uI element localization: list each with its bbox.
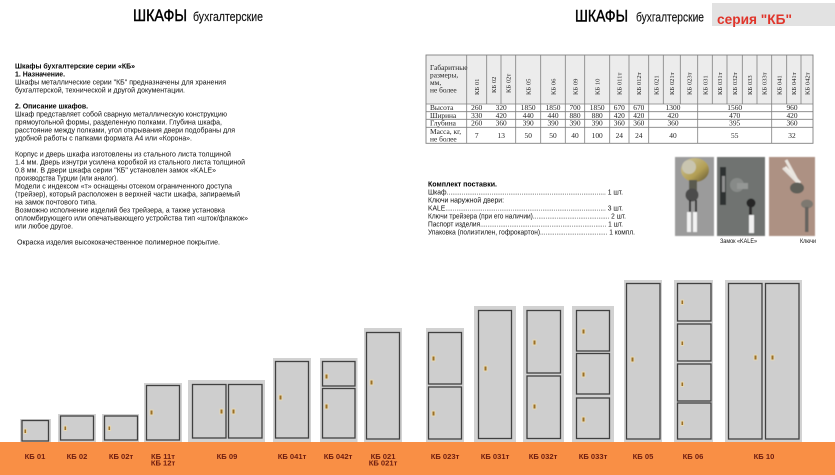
model column headings: КБ 02т xyxy=(506,74,513,93)
row: height: 1850 xyxy=(546,103,561,112)
description text block: Модели с индексом «т» оснащены отсеком ограниченного доступа xyxy=(15,182,233,190)
row: depth: 360 xyxy=(633,119,645,128)
description text block xyxy=(15,62,248,246)
model column headings: КБ 011т xyxy=(617,73,624,95)
description text block: удобной работы с папками формата А4 или «Корона». xyxy=(15,134,192,142)
row: depth: 390 xyxy=(523,119,534,128)
row: height: 670 xyxy=(633,103,645,112)
model column headings xyxy=(474,72,811,95)
cabinet model labels: КБ 031т xyxy=(481,452,510,461)
description text block: Корпус и дверь шкафа изготовлены из стального листа толщиной xyxy=(15,150,231,158)
cabinet: КБ 01 xyxy=(20,419,51,442)
row: height: 1850 xyxy=(521,103,536,112)
description text block: или любое другое. xyxy=(15,222,73,230)
row headings: Масса, кг, xyxy=(430,127,461,136)
description text block: на замок почтового типа. xyxy=(15,198,97,206)
row headings: Глубина xyxy=(430,119,457,128)
row: mass: 32 xyxy=(788,131,796,140)
series badge xyxy=(712,3,835,27)
delivery set text block: Комплект поставки. xyxy=(428,180,497,188)
row: mass: 50 xyxy=(549,131,557,140)
model column headings: КБ 10 xyxy=(594,78,602,95)
table grid xyxy=(426,55,813,143)
model column headings: КБ 02 xyxy=(491,77,498,93)
table header background xyxy=(426,55,813,104)
row: width: 440 xyxy=(547,111,559,120)
description text block: бухгалтерской, технической и другой документации. xyxy=(15,86,185,94)
cabinet: КБ 11т / КБ 12т xyxy=(144,383,182,442)
row: width: 420 xyxy=(614,111,625,120)
dimensions table xyxy=(426,55,813,144)
photo: keys xyxy=(769,157,815,236)
row: width: 330 xyxy=(471,111,483,120)
cabinet model labels: КБ 05 xyxy=(633,452,654,461)
row: mass: 100 xyxy=(592,131,603,140)
model column headings: КБ 06 xyxy=(550,78,557,95)
row: height: 670 xyxy=(614,103,625,112)
description text block: Возможно исполнение изделий без трейзера, а также установка xyxy=(15,206,226,214)
row: mass: 40 xyxy=(571,131,579,140)
model column headings: КБ 05 xyxy=(526,78,532,95)
cabinet model labels: КБ 09 xyxy=(217,452,237,461)
model column headings: КБ 041 xyxy=(776,75,784,95)
row: height: 1300 xyxy=(666,103,681,112)
model column headings: КБ 033 xyxy=(747,75,754,95)
cabinet: КБ 09 xyxy=(188,380,265,442)
photo captions xyxy=(720,238,816,245)
row: depth: 390 xyxy=(592,119,603,128)
orange floor band xyxy=(0,442,835,475)
description text block: 1.4 мм. Дверь изнутри усилена коробкой из стального листа толщиной xyxy=(15,158,245,167)
row: mass: 24 xyxy=(635,131,643,140)
cabinet: КБ 042т xyxy=(320,358,358,442)
cabinet model labels: КБ 11т xyxy=(151,452,175,461)
cabinet: КБ 021 / КБ 021т xyxy=(364,328,402,442)
model column headings: КБ 031 xyxy=(702,75,709,95)
right title: бухгалтерские xyxy=(636,10,704,24)
row: depth: 360 xyxy=(786,119,798,128)
row headings: не более xyxy=(430,86,457,94)
row: width: 420 xyxy=(633,111,645,120)
right title xyxy=(575,6,704,26)
delivery set text block: Ключи наружной двери: xyxy=(428,196,504,204)
row: mass: 40 xyxy=(669,131,677,140)
cabinet: КБ 06 xyxy=(674,280,713,442)
cabinet: КБ 023т xyxy=(426,328,464,442)
description text block: (трейзер), который расположен в верхней части шкафа, запираемый xyxy=(15,190,240,198)
cabinet: КБ 02 xyxy=(58,414,96,442)
model column headings: КБ 042т xyxy=(804,72,811,95)
delivery set text block: Паспорт изделия..................................................................... 1 шт. xyxy=(428,220,623,228)
right title: ШКАФЫ xyxy=(575,6,628,26)
description text block: 0.8 мм. В двери шкафа серии "КБ" установлен замок «KALE» xyxy=(15,166,216,175)
cabinet: КБ 05 xyxy=(624,280,662,442)
row: height: 700 xyxy=(569,103,581,112)
row: depth xyxy=(471,119,798,128)
row: depth: 390 xyxy=(547,119,559,128)
row headings: мм, xyxy=(430,78,441,87)
row: height: 1850 xyxy=(590,103,605,112)
left title xyxy=(133,6,263,25)
description text block: Шкафы бухгалтерские серии «КБ» xyxy=(15,62,135,70)
row: width xyxy=(471,111,798,120)
row: depth: 395 xyxy=(729,119,741,128)
cabinet model labels: КБ 021 xyxy=(371,452,396,461)
row: height: 260 xyxy=(471,103,483,112)
row headings: Высота xyxy=(430,103,454,112)
row headings xyxy=(430,63,468,144)
row headings: не более xyxy=(430,134,457,144)
row: width: 880 xyxy=(592,111,603,120)
row: mass: 24 xyxy=(616,131,623,140)
model column headings: КБ 01 xyxy=(474,79,481,95)
cabinet model labels: КБ 032т xyxy=(529,452,558,461)
cabinet model labels xyxy=(25,452,774,468)
model column headings: КБ 032т xyxy=(732,72,739,95)
photo captions: Ключи xyxy=(800,238,816,245)
row: width: 420 xyxy=(496,111,507,120)
description text block: опломбирующего или опечатывающего устройства тип «шток/флажок» xyxy=(15,214,248,222)
model column headings: КБ 031т xyxy=(717,72,724,95)
row: mass: 50 xyxy=(525,131,532,140)
row: mass: 7 xyxy=(475,131,479,140)
row: width: 880 xyxy=(569,111,581,120)
cabinet: КБ 10 xyxy=(725,280,802,442)
row: mass: 55 xyxy=(731,131,739,140)
left title: бухгалтерские xyxy=(193,10,263,24)
cabinet: КБ 041т xyxy=(273,358,311,442)
row headings: размеры, xyxy=(430,70,458,80)
row: mass xyxy=(475,131,796,140)
row: depth: 360 xyxy=(667,119,679,128)
description text block: 1. Назначение. xyxy=(15,70,65,78)
delivery set text block: KALE...................................................................................... 3 шт. xyxy=(428,204,623,212)
delivery set text block xyxy=(428,180,635,236)
row: width: 470 xyxy=(729,111,741,120)
series badge: серия "КБ" xyxy=(717,12,792,27)
row: width: 420 xyxy=(786,111,798,120)
cabinet model labels: КБ 021т xyxy=(369,458,398,468)
model column headings: КБ 041т xyxy=(791,72,798,95)
delivery set text block: Упаковка (полиэтилен, гофрокартон)..................................... 1 компл. xyxy=(428,228,635,236)
row: height: 960 xyxy=(786,103,798,112)
photo captions: Замок «KALE» xyxy=(720,238,757,245)
description text block: 2. Описание шкафов. xyxy=(15,102,88,110)
row: mass: 13 xyxy=(498,131,505,140)
photo: lock with keys xyxy=(675,157,714,236)
description text block: прямоугольной формы, разделенную полками. Глубина шкафа, xyxy=(15,118,222,126)
model column headings: КБ 023т xyxy=(686,72,693,95)
row: height: 1560 xyxy=(727,103,742,112)
cabinet model labels: КБ 02 xyxy=(67,452,87,461)
delivery set text block: Ключи трейзера (при его наличии).......................................... 2 шт. xyxy=(428,212,626,220)
cabinet model labels: КБ 042т xyxy=(324,452,353,461)
model column headings: КБ 09 xyxy=(572,78,579,95)
cabinet model labels: КБ 041т xyxy=(278,452,307,461)
cabinet model labels: КБ 023т xyxy=(431,452,460,461)
cabinet model labels: КБ 01 xyxy=(25,452,46,461)
row: depth: 360 xyxy=(614,119,625,128)
row: width: 420 xyxy=(667,111,679,120)
row headings: Ширина xyxy=(430,111,457,120)
cabinet: КБ 032т xyxy=(523,306,564,442)
model column headings: КБ 021т xyxy=(669,72,676,95)
cabinet: КБ 031т xyxy=(474,306,516,442)
photo: lock on door xyxy=(717,157,765,236)
row headings: Габаритные xyxy=(430,63,468,72)
description text block: Окраска изделия высококачественное полимерное покрытие. xyxy=(17,238,220,246)
cabinet model labels: КБ 10 xyxy=(754,452,774,461)
description text block: расстояние между полками, угол открывания двери подобраны для xyxy=(15,126,235,134)
row: depth: 360 xyxy=(496,119,507,128)
model column headings: КБ 033т xyxy=(762,72,769,95)
cabinet model labels: КБ 06 xyxy=(683,452,703,461)
model column headings: КБ 012т xyxy=(636,72,643,95)
model column headings: КБ 021 xyxy=(653,75,660,95)
delivery set text block: Шкаф..................................................................................... 1 шт. xyxy=(428,188,623,196)
row: height: 320 xyxy=(496,103,507,112)
cabinet: КБ 033т xyxy=(572,306,614,442)
cabinet model labels: КБ 12т xyxy=(151,458,175,468)
description text block: Шкафы металлические серии "КБ" предназначены для хранения xyxy=(15,78,226,86)
cabinet: КБ 02т xyxy=(102,414,139,442)
left title: ШКАФЫ xyxy=(133,6,187,25)
cabinet model labels: КБ 02т xyxy=(109,452,133,461)
row: height xyxy=(471,103,798,112)
description text block: Шкаф представляет собой сварную металлическую конструкцию xyxy=(15,110,227,118)
row: depth: 260 xyxy=(471,119,483,128)
row: depth: 390 xyxy=(569,119,581,128)
cabinet model labels: КБ 033т xyxy=(579,452,608,461)
description text block: производства Турции (или аналог). xyxy=(15,174,118,183)
row: width: 440 xyxy=(523,111,534,120)
